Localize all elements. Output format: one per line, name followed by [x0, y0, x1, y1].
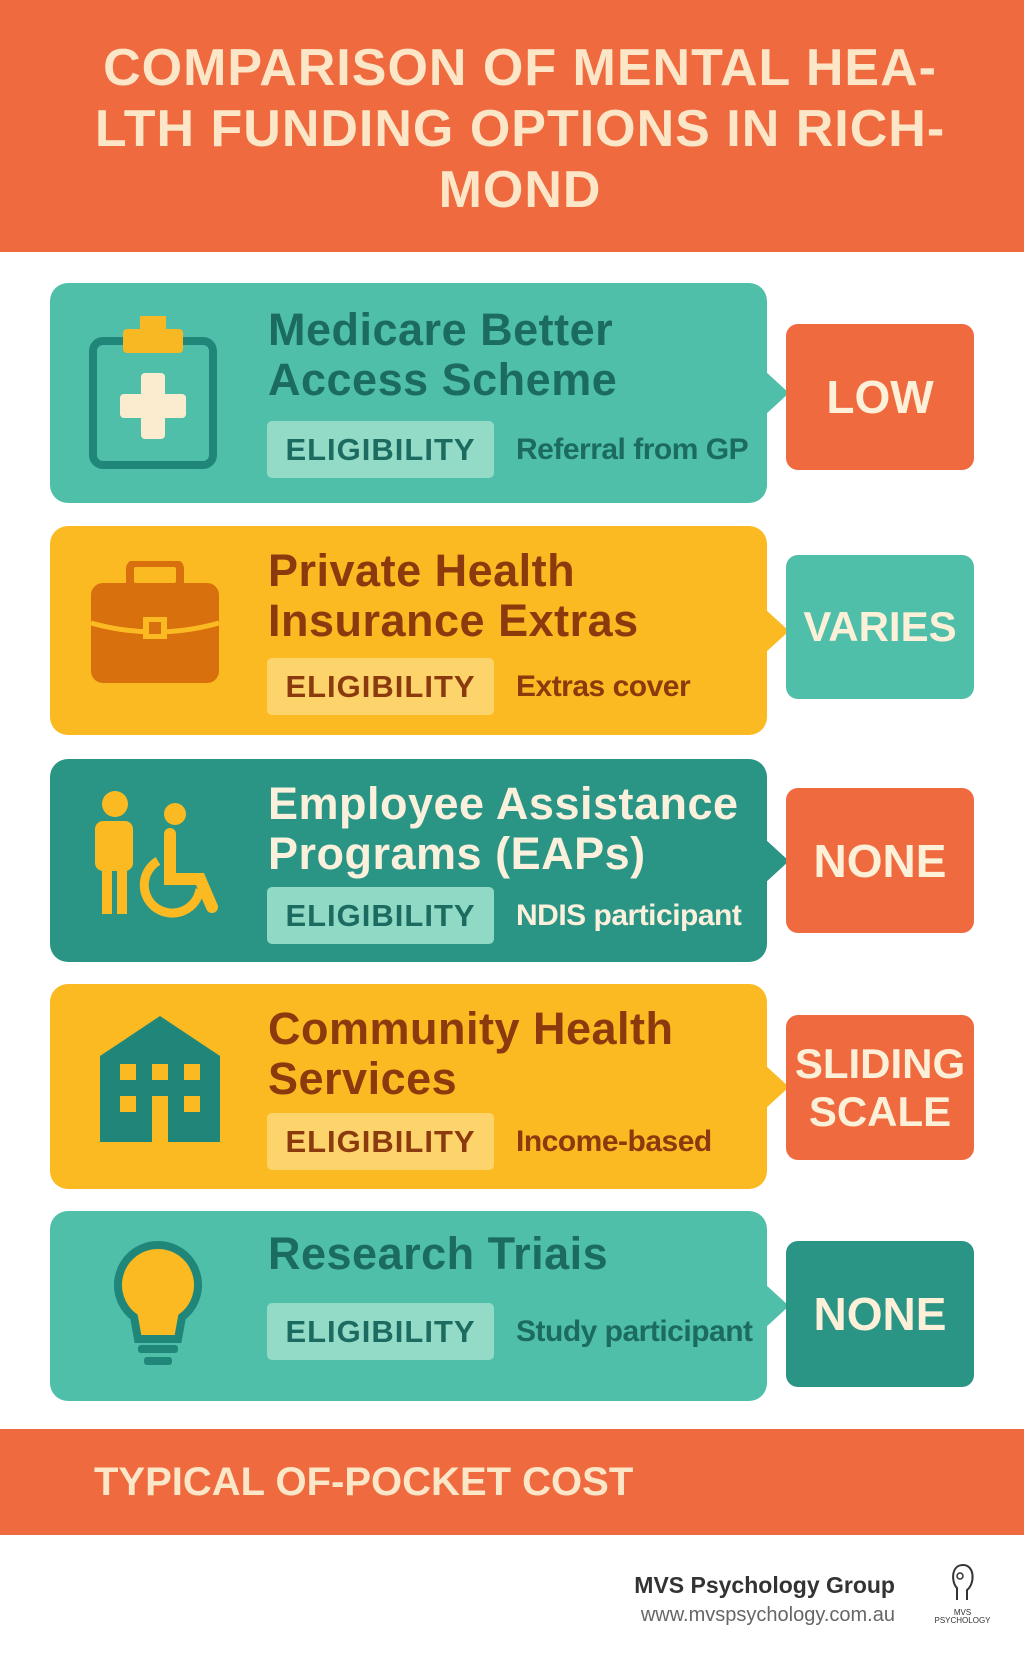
badge: low: LOW: [826, 371, 934, 423]
badge: varies: VARIES: [803, 603, 957, 650]
badge: none: NONE: [814, 834, 946, 886]
card: private health: [50, 526, 767, 735]
eligibility pill: [267, 1113, 494, 1170]
card: research: [50, 1211, 767, 1401]
title: MOND: [439, 161, 601, 219]
title: EAP: Programs (EAPs): [268, 828, 646, 879]
title: private health: [268, 545, 639, 646]
icon: clipboard: [89, 316, 217, 469]
title: EAP: Employee Assistance: [268, 778, 739, 829]
icon: building: [100, 1016, 220, 1142]
title: medicare: Access Scheme: [268, 354, 617, 405]
footer bar text: TYPICAL OF-POCKET COST: [94, 1460, 633, 1504]
brand text: MVS Psychology Group: [634, 1572, 895, 1598]
footer bar: [0, 1429, 1024, 1535]
header: [0, 0, 1024, 252]
badge: sliding scale: SLIDING: [795, 1040, 965, 1086]
title: private health: Private Health: [268, 545, 575, 596]
eligibility pill: ELIGIBILITY: [285, 898, 476, 933]
brand text: www.mvspsychology.com.au: [641, 1604, 895, 1626]
badge: none: [786, 1241, 974, 1387]
icon: briefcase: [91, 561, 219, 683]
badge: sliding scale: [786, 1015, 974, 1160]
title: medicare: Medicare Better: [268, 304, 613, 355]
card: EAP: [50, 759, 767, 962]
title: EAP: [268, 778, 739, 879]
title: community: Community Health: [268, 1003, 674, 1054]
badge: sliding scale: SCALE: [809, 1088, 951, 1134]
eligibility pill: ELIGIBILITY: [285, 1314, 476, 1349]
eligibility pill: ELIGIBILITY: [285, 669, 476, 704]
eligibility pill: [267, 887, 494, 944]
value: Income-based: [516, 1125, 712, 1158]
eligibility pill: ELIGIBILITY: [285, 432, 476, 467]
value: NDIS participant: [516, 899, 741, 932]
logo: MVS: [954, 1608, 971, 1617]
value: Extras cover: [516, 670, 690, 703]
logo: [934, 1564, 990, 1625]
value: Study participant: [516, 1315, 753, 1348]
card: medicare: [50, 283, 767, 503]
title: [95, 39, 945, 219]
icon: lightbulb: [114, 1241, 202, 1365]
title: medicare: [268, 304, 617, 405]
title: community: Services: [268, 1053, 457, 1104]
brand text: [634, 1572, 895, 1626]
eligibility pill: ELIGIBILITY: [285, 1124, 476, 1159]
eligibility pill: [267, 1303, 494, 1360]
badge: varies: [786, 555, 974, 699]
eligibility pill: [267, 421, 494, 478]
title: private health: Insurance Extras: [268, 595, 639, 646]
eligibility pill: [267, 658, 494, 715]
value: Referral from GP: [516, 433, 748, 466]
title: research: Research Triais: [268, 1228, 608, 1279]
title: COMPARISON OF MENTAL HEA-: [103, 39, 937, 97]
badge: none: [786, 788, 974, 933]
card: community: [50, 984, 767, 1189]
badge: low: [786, 324, 974, 470]
badge: none: NONE: [814, 1288, 946, 1340]
icon: people: [95, 791, 218, 918]
title: LTH FUNDING OPTIONS IN RICH-: [95, 100, 945, 158]
title: community: [268, 1003, 674, 1104]
logo: PSYCHOLOGY: [934, 1616, 990, 1625]
